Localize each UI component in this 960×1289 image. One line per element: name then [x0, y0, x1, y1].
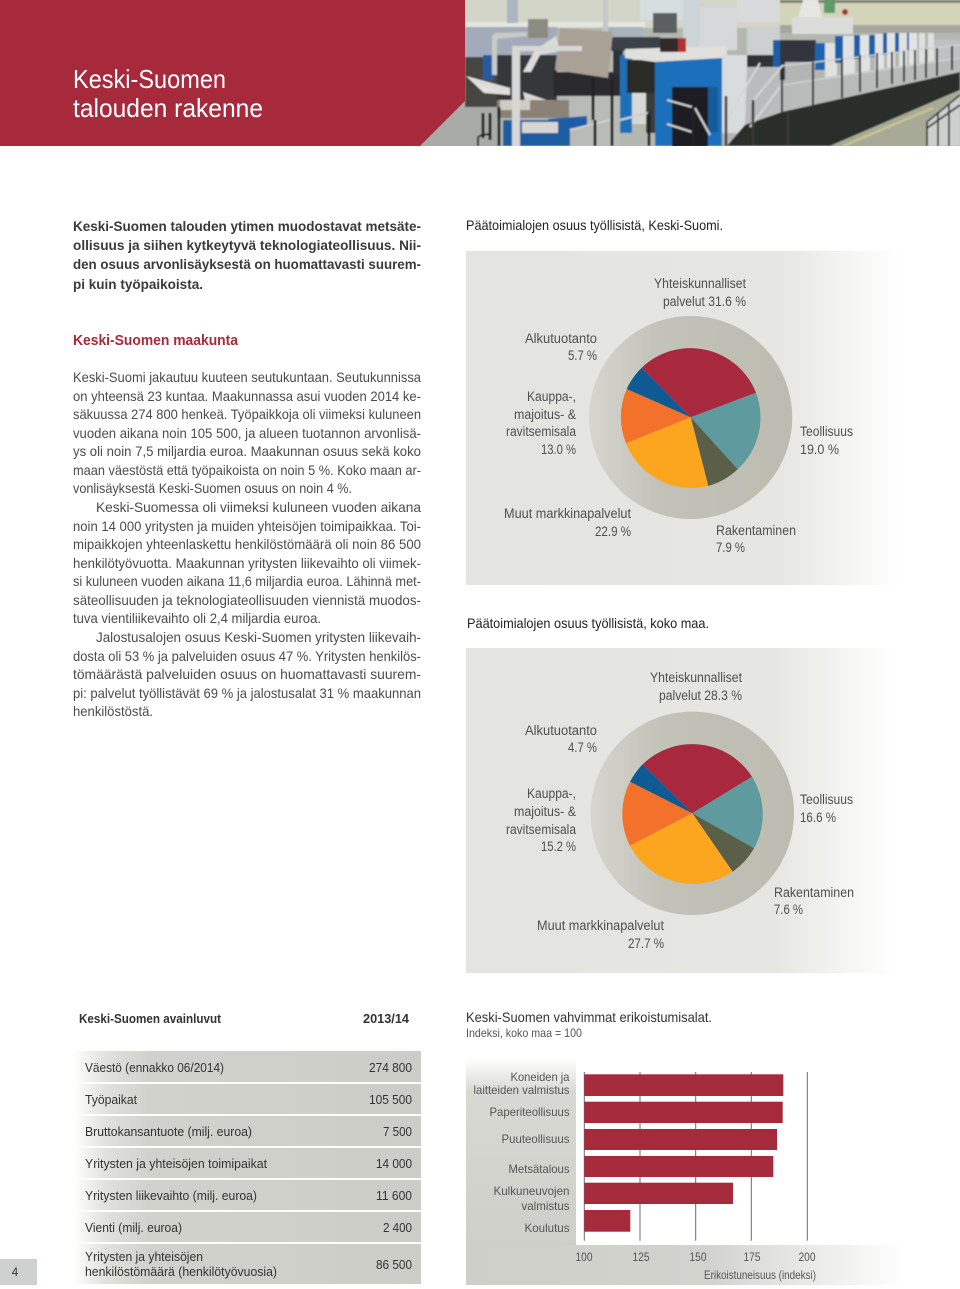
labels pie 2: majoitus- & — [514, 804, 576, 819]
title: talouden rakenne — [73, 93, 263, 123]
walkway and base — [782, 57, 960, 112]
intro paragraph: Keski-Suomen talouden ytimen muodostavat metsäte- — [73, 218, 421, 234]
intro paragraph: pi kuin työpaikoista. — [73, 276, 203, 292]
labels pie 1: Yhteiskunnalliset — [654, 276, 746, 291]
labels pie 2: Muut markkinapalvelut — [537, 918, 664, 933]
key figures table: Yritysten liikevaihto (milj. euroa) — [85, 1188, 257, 1203]
labels pie 1: majoitus- & — [514, 407, 576, 422]
key figures table: Väestö (ennakko 06/2014) — [85, 1060, 224, 1075]
category labels: Koneiden ja — [510, 1070, 570, 1084]
category labels: Metsätalous — [508, 1162, 570, 1176]
stairs — [727, 105, 800, 146]
page number: 4 — [12, 1267, 19, 1279]
panel: bar chart — [466, 1058, 906, 1285]
labels pie 1: ravitsemisala — [506, 424, 576, 439]
heading: bar chart: Indeksi, koko maa = 100 — [466, 1026, 582, 1040]
key figures table: 105 500 — [369, 1092, 412, 1107]
labels pie 2: Teollisuus — [800, 792, 853, 807]
labels pie 1: 19.0 % — [800, 442, 839, 457]
pie chart 1 — [621, 348, 760, 488]
blue tray — [503, 120, 570, 146]
heading: bar chart — [466, 1009, 712, 1040]
body text: Keski-Suomi jakautuu kuuteen seutukuntaan. Seutukunnissa — [73, 369, 421, 385]
body text: mipaikkojen yhteenlaskettu henkilöstömäärä oli noin 86 500 — [73, 536, 421, 552]
key figures table: 7 500 — [383, 1124, 412, 1139]
labels pie 1: Rakentaminen — [716, 523, 796, 538]
key figures table: 11 600 — [376, 1188, 412, 1203]
intro paragraph — [73, 218, 421, 292]
labels pie 1 — [504, 276, 853, 555]
body text: tuva vientiliikevaihto oli 2,4 miljardia euroa. — [73, 610, 321, 626]
labels pie 2: 16.6 % — [800, 810, 836, 825]
heading: pie chart 1: Päätoimialojen osuus työllisistä, Keski-Suomi. — [466, 217, 723, 233]
category labels: Koulutus — [524, 1221, 570, 1235]
category labels: laitteiden valmistus — [474, 1083, 570, 1097]
labels pie 1: palvelut 31.6 % — [663, 294, 746, 309]
axis labels: 200 — [798, 1250, 816, 1264]
bars — [584, 1074, 783, 1232]
key figures table: 86 500 — [376, 1257, 412, 1272]
pie ring 1 — [589, 316, 792, 519]
axis labels — [576, 1250, 816, 1282]
wall and floor — [465, 27, 960, 146]
labels pie 1: Kauppa-, — [527, 389, 576, 404]
panel: pie chart 1 — [466, 251, 900, 585]
key figures table: Yritysten ja yhteisöjen — [85, 1249, 203, 1264]
header red banner with title — [0, 0, 465, 146]
body text: on yhteensä 23 kuntaa. Maakunnassa asui vuoden 2014 ke- — [73, 388, 421, 404]
axis labels: 100 — [576, 1250, 593, 1264]
category labels — [474, 1070, 570, 1235]
labels pie 2: palvelut 28.3 % — [659, 688, 742, 703]
key figures table: 2 400 — [383, 1220, 412, 1235]
key figures table — [73, 1051, 421, 1284]
key figures table: Bruttokansantuote (milj. euroa) — [85, 1124, 252, 1139]
table heading: key figures: Keski-Suomen avainluvut — [79, 1011, 222, 1026]
white arches and papers — [492, 32, 527, 75]
body text — [73, 369, 421, 719]
body text: henkilötyövuotta. Maakunnan yritysten liikevaihto oli viimek- — [73, 555, 421, 571]
body text: dosta oli 53 % ja palveluiden osuus 47 %. Yritysten henkilös- — [73, 648, 421, 664]
pie chart 2 — [622, 744, 763, 884]
intro paragraph: ollisuus ja siihen kytkeytyvä teknologiateollisuus. Nii- — [73, 237, 421, 253]
key figures table: Työpaikat — [85, 1092, 137, 1107]
key figures table: 14 000 — [376, 1156, 412, 1171]
grey board — [555, 28, 613, 78]
labels pie 2: Kauppa-, — [527, 786, 576, 801]
page number — [0, 1259, 37, 1285]
pie ring 2 — [591, 712, 794, 915]
body text: Keski-Suomessa oli viimeksi kuluneen vuoden aikana — [96, 499, 421, 515]
labels pie 2: 27.7 % — [628, 936, 664, 951]
section heading: Keski-Suomen maakunta — [73, 333, 239, 349]
category labels: valmistus — [522, 1199, 570, 1213]
category labels: Kulkuneuvojen — [494, 1184, 570, 1198]
panel: pie chart 2 — [466, 648, 894, 973]
body text: vonlisäyksestä Keski-Suomen osuus on noin 4 %. — [73, 480, 352, 496]
category labels: Paperiteollisuus — [490, 1105, 570, 1119]
labels pie 2: ravitsemisala — [506, 822, 576, 837]
main press unit — [620, 55, 632, 133]
rails — [478, 45, 960, 146]
left machinery — [465, 57, 497, 107]
body text: säkuussa 274 800 henkeä. Työpaikkoja oli viimeksi kuluneen — [73, 406, 421, 422]
axis labels: 150 — [690, 1250, 707, 1264]
body text: noin 14 000 yritysten ja muiden yhteisöjen toimipaikkaa. Toi- — [73, 518, 421, 534]
body text: ys oli noin 7,5 miljardia euroa. Maakunnan osuus sekä koko — [73, 443, 421, 459]
body text: tömäärästä palveluiden osuus on huomattavasti suurem- — [73, 666, 421, 682]
body text: henkilöstöstä. — [73, 703, 153, 719]
key figures table: Yritysten ja yhteisöjen toimipaikat — [85, 1156, 267, 1171]
heading: pie chart 2: Päätoimialojen osuus työllisistä, koko maa. — [467, 615, 709, 631]
table heading: key figures: 2013/14 — [363, 1011, 410, 1026]
intro paragraph: den osuus arvonlisäyksestä on huomattavasti suurem- — [73, 256, 421, 272]
body text: vuoden aikana noin 105 500, ja alueen tuotannon arvonlisä- — [73, 425, 421, 441]
body text: pi: palvelut työllistävät 69 % ja jalostusalat 31 % maakunnan — [73, 685, 421, 701]
body text: säteollisuuden ja teknologiateollisuuden viennistä muodos- — [73, 592, 421, 608]
heading: bar chart: Keski-Suomen vahvimmat erikoistumisalat. — [466, 1009, 712, 1025]
key figures table: henkilöstömäärä (henkilötyövuosia) — [85, 1264, 277, 1279]
title — [73, 64, 263, 123]
labels pie 2: Rakentaminen — [774, 885, 854, 900]
labels pie 1: 7.9 % — [716, 540, 745, 555]
labels pie 2: Alkutuotanto — [525, 723, 597, 738]
axis labels: 125 — [632, 1250, 650, 1264]
key figures table: Vienti (milj. euroa) — [85, 1220, 182, 1235]
labels pie 2: 4.7 % — [568, 740, 597, 755]
press units right — [792, 17, 853, 34]
body text: si kuluneen vuoden aikana 11,6 miljardia euroa. Lähinnä met- — [73, 573, 421, 589]
labels pie 1: 22.9 % — [595, 524, 631, 539]
body text: Jalostusalojen osuus Keski-Suomen yritysten liikevaih- — [96, 629, 421, 645]
axis labels: Erikoistuneisuus (indeksi) — [704, 1268, 816, 1282]
labels pie 1: Teollisuus — [800, 424, 853, 439]
labels pie 1: Muut markkinapalvelut — [504, 506, 631, 521]
axis labels: 175 — [744, 1250, 761, 1264]
labels pie 2: 7.6 % — [774, 902, 803, 917]
header photo: printing press — [405, 0, 960, 150]
title: Keski-Suomen — [73, 64, 226, 94]
labels pie 2: Yhteiskunnalliset — [650, 670, 742, 685]
labels pie 2: 15.2 % — [541, 839, 576, 854]
labels pie 2 — [506, 670, 854, 951]
category labels: Puuteollisuus — [502, 1132, 570, 1146]
body text: maan väestöstä että työpaikoista on noin 5 %. Koko maan ar- — [73, 462, 421, 478]
labels pie 1: 13.0 % — [541, 442, 576, 457]
labels pie 1: Alkutuotanto — [525, 331, 597, 346]
key figures table: 274 800 — [369, 1060, 412, 1075]
table heading: key figures — [79, 1011, 410, 1026]
labels pie 1: 5.7 % — [568, 348, 597, 363]
